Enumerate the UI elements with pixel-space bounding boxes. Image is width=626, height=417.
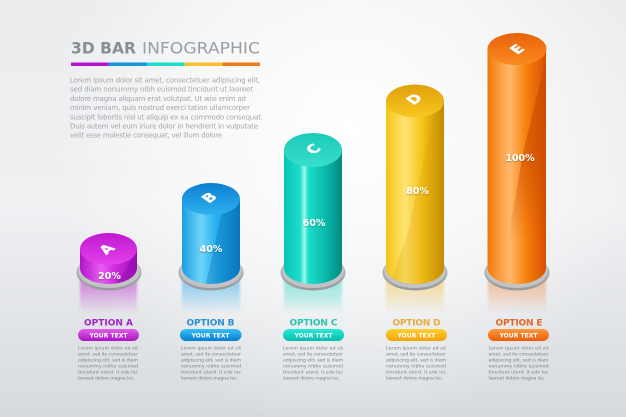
cylinder top E <box>488 33 546 65</box>
value 60%: 60% <box>303 218 326 229</box>
option E body: laoreet dolore magna lec. <box>488 376 546 382</box>
option C body: Lorem ipsum dolor ed sit <box>283 346 343 352</box>
cylinder side A <box>80 249 137 284</box>
intro paragraph: minim veniam, quis nostrud exerci tation ullamcorper <box>70 104 250 112</box>
option C body: amet, sed ite consectetuer <box>283 352 343 358</box>
option E body: nonummy nibhe euismod <box>488 364 549 370</box>
value 40%: 40% <box>200 244 223 255</box>
bar E: 100% <box>484 33 550 313</box>
letter A: A <box>96 241 119 257</box>
option E heading: OPTION E <box>496 318 542 328</box>
option A body: adipiscing elit, sed is diam <box>78 358 139 364</box>
cylinder side E <box>488 49 546 284</box>
option A body: tincidunt uterd. it ede lec <box>78 370 138 376</box>
cylinder top C <box>284 133 342 167</box>
option D body: laoreet dolore magna lec. <box>386 376 443 382</box>
option D column <box>386 318 447 382</box>
intro paragraph: sed diam nonummy nibh euismod tincidunt ut laoreet <box>70 86 253 94</box>
option D pill text: YOUR TEXT <box>396 332 436 339</box>
option E body: amet, sed ite consectetuer <box>488 352 549 358</box>
bar C: 60% <box>280 133 346 313</box>
option D body: tincidunt uterd. it ede lec <box>386 370 446 376</box>
reflection E <box>488 278 546 313</box>
option D body: adipiscing elit, sed is diam <box>386 358 447 364</box>
option C body: tincidunt uterd. it ede lec <box>283 370 343 376</box>
reflection A <box>80 278 137 313</box>
option D body: nonummy nibhe euismod <box>386 364 446 370</box>
option D pill <box>386 329 447 341</box>
base plate C <box>280 254 346 290</box>
option E pill text: YOUR TEXT <box>498 332 538 339</box>
reflection D <box>386 278 444 313</box>
option C body: adipiscing elit, sed is diam <box>283 358 344 364</box>
option A column <box>78 318 139 382</box>
intro paragraph: velit esse molestie consequat, vel illum dolore <box>70 132 222 140</box>
option B body: tincidunt uterd. it ede lec <box>181 370 241 376</box>
option A body: laoreet dolore magna lec. <box>78 376 135 382</box>
option E body <box>488 346 549 382</box>
letter E: E <box>507 42 529 57</box>
bar A: 20% <box>76 233 142 313</box>
title: 3D BAR <box>71 38 136 58</box>
option B body: amet, sed ite consectetuer <box>181 352 241 358</box>
option A heading: OPTION A <box>84 318 133 328</box>
option A body: amet, sed ite consectetuer <box>78 352 138 358</box>
letter C: C <box>302 142 325 157</box>
option B body: nonummy nibhe euismod <box>181 364 241 370</box>
option A pill text: YOUR TEXT <box>88 332 128 339</box>
option B body <box>181 346 242 382</box>
value 80%: 80% <box>406 186 429 197</box>
base plate A <box>76 254 142 290</box>
cylinder top D <box>386 84 444 118</box>
letter D: D <box>403 91 427 108</box>
base plate B <box>178 254 244 290</box>
option B body: laoreet dolore magna lec. <box>181 376 238 382</box>
base plate E <box>484 254 550 290</box>
option B body: Lorem ipsum dolor ed sit <box>181 346 241 352</box>
option D body: Lorem ipsum dolor ed sit <box>386 346 446 352</box>
option B pill <box>180 329 242 341</box>
option B body: adipiscing elit, sed is diam <box>181 358 242 364</box>
letter B: B <box>198 190 221 206</box>
option C body: nonummy nibhe euismod <box>283 364 343 370</box>
value 20%: 20% <box>98 271 121 282</box>
title: INFOGRAPHIC <box>142 38 260 58</box>
cylinder side D <box>386 101 444 284</box>
option C heading: OPTION C <box>290 318 338 328</box>
reflection C <box>284 278 342 313</box>
bar D: 80% <box>382 84 448 313</box>
option C column <box>283 318 344 382</box>
title <box>71 38 260 58</box>
option D heading: OPTION D <box>392 318 440 328</box>
option A pill <box>78 329 139 341</box>
option E pill <box>488 329 549 341</box>
option E body: Lorem ipsum dolor ed sit <box>488 346 549 352</box>
reflection B <box>182 278 240 313</box>
base plate D <box>382 254 448 290</box>
cylinder top B <box>182 183 240 215</box>
option A body <box>78 346 139 382</box>
option B pill text: YOUR TEXT <box>190 332 230 339</box>
intro paragraph: dolore magna aliquam erat volutpat. Ut wisi enim ad <box>70 95 246 103</box>
option E body: tincidunt uterd. it ede lec <box>488 370 549 376</box>
option C pill text: YOUR TEXT <box>294 332 333 339</box>
option A body: nonummy nibhe euismod <box>78 364 138 370</box>
option E body: adipiscing elit, sed is diam <box>488 358 549 364</box>
option D body <box>386 346 447 382</box>
option C pill <box>283 329 344 341</box>
value 100%: 100% <box>505 153 535 164</box>
cylinder side B <box>182 199 240 284</box>
intro paragraph <box>70 76 263 140</box>
intro paragraph: suscipit lobortis nisl ut aliquip ex ea commodo consequat. <box>70 113 263 121</box>
colour strip under title <box>71 62 260 66</box>
option E column <box>488 318 549 382</box>
option D body: amet, sed ite consectetuer <box>386 352 446 358</box>
intro paragraph: Lorem ipsum dolor sit amet, consectetuer adipiscing elit, <box>70 76 260 84</box>
option B heading: OPTION B <box>186 318 235 328</box>
option C body <box>283 346 344 382</box>
cylinder side C <box>284 150 342 284</box>
option B column <box>180 318 242 382</box>
cylinder top A <box>80 233 137 265</box>
bar B: 40% <box>178 183 244 313</box>
option C body: laoreet dolore magna lec. <box>283 376 340 382</box>
intro paragraph: Duis autem vel eum iriure dolor in hendrerit in vulputate <box>70 122 258 130</box>
option A body: Lorem ipsum dolor ed sit <box>78 346 138 352</box>
